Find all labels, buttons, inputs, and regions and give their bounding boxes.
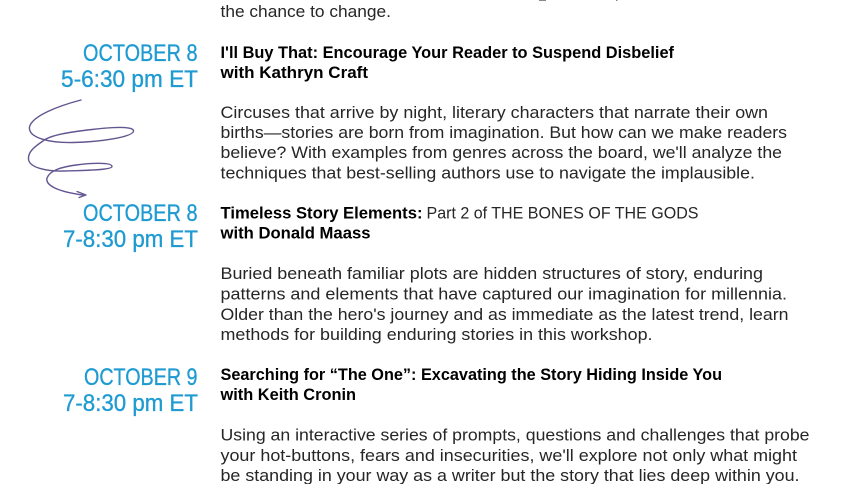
date and time: October 8, 7-8:30 pm: OCTOBER 8 bbox=[83, 200, 198, 227]
heading: Timeless Story Elements: Part 2 of THE BONES OF THE GODS bbox=[426, 204, 698, 222]
description: Searching for The One: Using an interactive series of prompts, questions and challenges that probe bbox=[220, 426, 810, 444]
session: October 8, 7-8:30 pm ET bbox=[63, 200, 788, 344]
date and time: October 8, 7-8:30 pm bbox=[63, 200, 198, 253]
heading: Timeless Story Elements: Timeless Story Elements: bbox=[220, 204, 422, 222]
description: I'll Buy That: believe? With examples from genres across the board, we'll analyze the bbox=[220, 143, 782, 162]
description: I'll Buy That: Circuses that arrive by night, literary characters that narrate their own bbox=[220, 103, 768, 122]
description: Timeless Story Elements: methods for building enduring stories in this workshop. bbox=[220, 325, 652, 344]
description: Searching for The One: your hot-buttons, fears and insecurities, we'll explore not only what might bbox=[220, 446, 797, 465]
date and time: October 9, 7-8:30 pm: OCTOBER 9 bbox=[84, 364, 198, 391]
heading: Timeless Story Elements: with Donald Maass bbox=[220, 224, 370, 242]
date and time: October 8, 5-6:30 pm: OCTOBER 8 bbox=[83, 40, 198, 67]
description: Timeless Story Elements: Older than the hero's journey and as immediate as the latest trend, learn bbox=[220, 305, 788, 324]
heading: Searching for The One: with Keith Cronin bbox=[220, 385, 356, 404]
description: Timeless Story Elements: Buried beneath familiar plots are hidden structures of story, enduring bbox=[220, 264, 763, 283]
session: October 8, 5-6:30 pm ET bbox=[61, 40, 787, 182]
heading: I'll Buy That bbox=[219, 43, 674, 82]
text block: end of previous session description: the chance to change. bbox=[220, 2, 391, 21]
date and time: October 9, 7-8:30 pm bbox=[63, 364, 198, 417]
icon: hand-drawn spiral arrow bbox=[28, 100, 134, 198]
session: October 9, 7-8:30 pm ET bbox=[63, 364, 810, 484]
heading: I'll Buy That: with Kathryn Craft bbox=[219, 63, 368, 82]
heading: Timeless Story Elements bbox=[220, 204, 698, 242]
description: I'll Buy That bbox=[220, 103, 787, 182]
description: I'll Buy That: births—stories are born from imagination. But how can we make readers bbox=[220, 123, 787, 142]
heading: Searching for The One bbox=[220, 365, 722, 404]
date and time: October 8, 5-6:30 pm bbox=[61, 40, 198, 93]
description: Searching for The One bbox=[220, 426, 810, 484]
description: Timeless Story Elements: patterns and elements that have captured our imagination for millennia. bbox=[220, 284, 787, 304]
heading: I'll Buy That: I'll Buy That: Encourage Your Reader to Suspend Disbelief bbox=[220, 43, 674, 62]
description: I'll Buy That: techniques that best-selling authors use to navigate the implausible. bbox=[220, 164, 755, 182]
date and time: October 9, 7-8:30 pm: 7-8:30 pm ET bbox=[63, 390, 198, 417]
heading: Searching for The One: Searching for “The One”: Excavating the Story Hiding Inside You bbox=[220, 365, 722, 384]
description: Timeless Story Elements bbox=[220, 264, 788, 344]
date and time: October 8, 7-8:30 pm: 7-8:30 pm ET bbox=[63, 226, 198, 253]
date and time: October 8, 5-6:30 pm: 5-6:30 pm ET bbox=[61, 66, 198, 93]
